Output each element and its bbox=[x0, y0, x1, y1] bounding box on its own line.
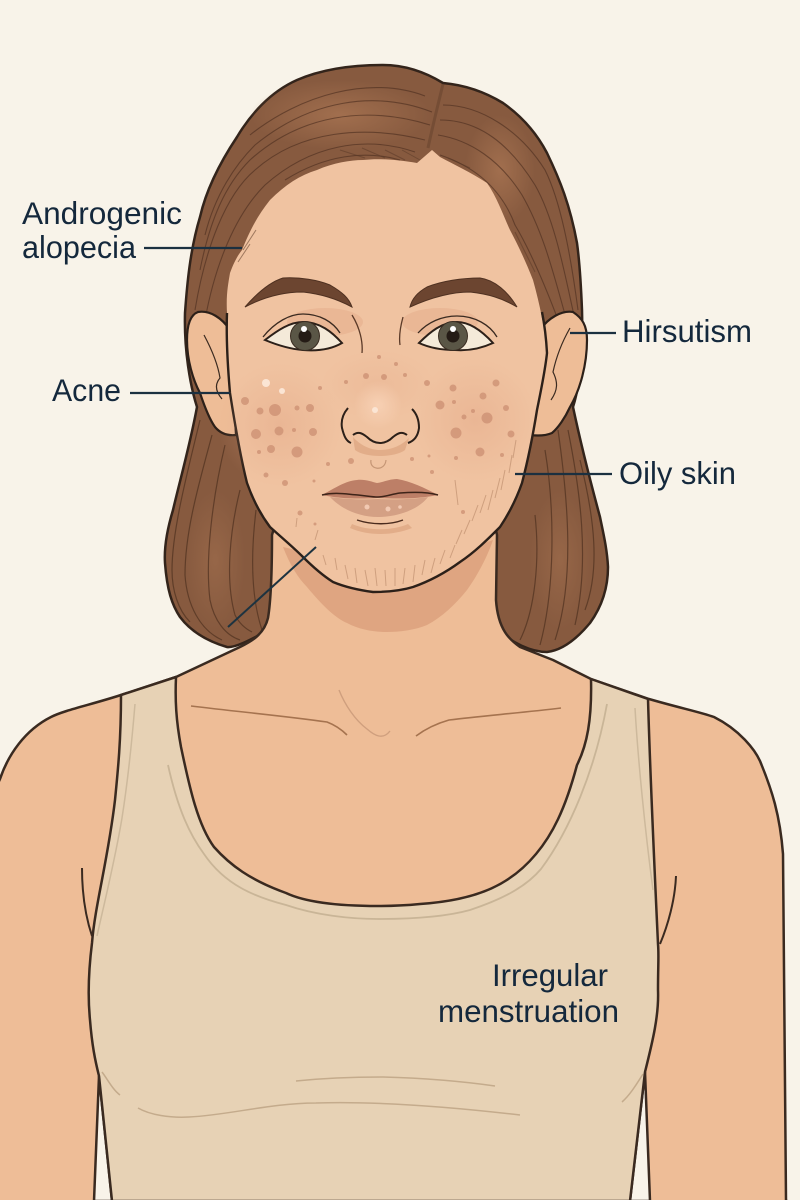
chin pointer line bbox=[228, 547, 316, 627]
label: Irregular menstruation bbox=[438, 957, 619, 1029]
hair bbox=[165, 65, 608, 652]
stubble bbox=[296, 440, 516, 586]
skin highlights bbox=[262, 379, 285, 394]
label: Androgenic alopecia: alopecia bbox=[22, 229, 136, 265]
body bbox=[0, 500, 790, 1200]
label: Acne: Acne bbox=[52, 372, 121, 408]
label: Irregular menstruation: menstruation bbox=[438, 993, 619, 1029]
ears bbox=[187, 312, 587, 436]
nose bbox=[342, 315, 419, 468]
label: Irregular menstruation: Irregular bbox=[492, 957, 608, 993]
face bbox=[218, 148, 547, 592]
mouth bbox=[322, 479, 438, 534]
label: Oily skin: Oily skin bbox=[619, 455, 736, 491]
tank top bbox=[89, 677, 658, 1200]
jaw outline bbox=[227, 312, 547, 592]
label: Hirsutism: Hirsutism bbox=[622, 313, 752, 349]
background gaps between arms and top bbox=[94, 1072, 650, 1200]
neck shadow bbox=[283, 540, 493, 632]
eyebrows bbox=[245, 278, 517, 307]
eyes bbox=[263, 314, 497, 350]
acne spots bbox=[241, 355, 514, 526]
hairline wisps bbox=[238, 148, 535, 272]
label: Androgenic alopecia: Androgenic bbox=[22, 195, 182, 231]
label: Androgenic alopecia bbox=[22, 195, 242, 265]
